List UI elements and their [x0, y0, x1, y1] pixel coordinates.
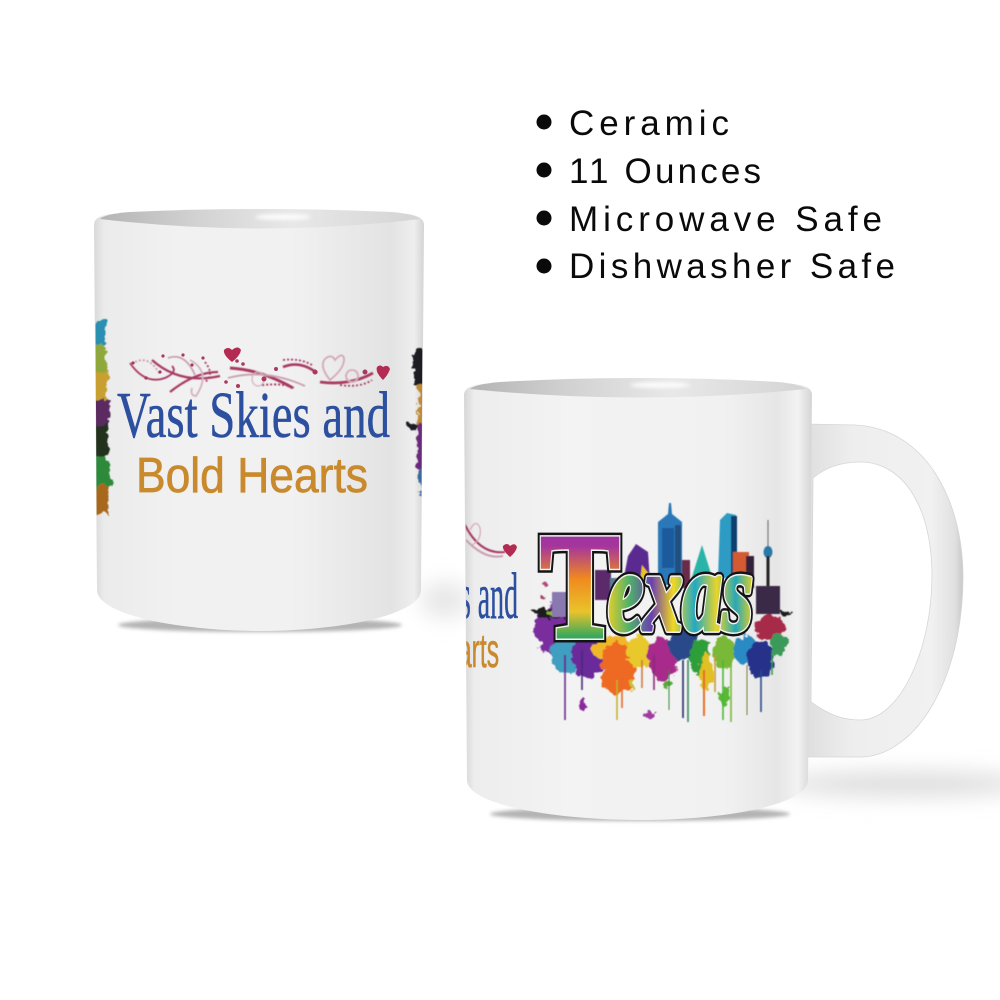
left mug message [117, 348, 390, 503]
wordmark T: T [541, 505, 619, 669]
ornament hearts [224, 348, 390, 380]
right mug body [464, 378, 812, 820]
wordmark exas: exas [608, 531, 753, 655]
wordmark T: T [541, 505, 619, 669]
paint drips [565, 650, 772, 722]
bullet: Dishwasher Safe: Dishwasher Safe [569, 247, 895, 286]
right mug rim highlight [630, 382, 690, 388]
left mug rim opening [100, 209, 420, 228]
headline: Vast Skies and: Vast Skies and [117, 379, 390, 452]
wrapped artwork edges [92, 322, 426, 514]
headline: Bold Hearts: Bold Hearts [136, 449, 368, 503]
feature list [536, 104, 895, 286]
right mug rim opening [470, 378, 806, 398]
fragment text: earts: arts [458, 625, 499, 678]
left mug [92, 209, 426, 631]
paint splashes [532, 582, 793, 718]
wordmark exas: exas [608, 531, 753, 655]
mug handle [805, 424, 963, 757]
mug shadows [118, 582, 1000, 821]
bullet: 11 Ounces: 11 Ounces [569, 152, 761, 191]
right mug [458, 378, 963, 820]
ornament dots [131, 353, 368, 388]
bullet: Ceramic: Ceramic [569, 104, 729, 143]
wordmark T: T [541, 505, 619, 669]
Texas artwork [532, 503, 793, 722]
left mug rim highlight [255, 214, 311, 220]
infographic canvas [94, 110, 1000, 823]
fragment ornament [465, 523, 505, 557]
right mug: s and [460, 560, 518, 633]
wrapped slogan fragment [466, 522, 518, 668]
skyline [552, 503, 780, 617]
fragment heart [503, 544, 517, 557]
left mug body [94, 209, 424, 631]
bullet: Microwave Safe: Microwave Safe [569, 200, 882, 239]
wordmark exas: exas [608, 531, 753, 655]
ornament [130, 355, 373, 396]
